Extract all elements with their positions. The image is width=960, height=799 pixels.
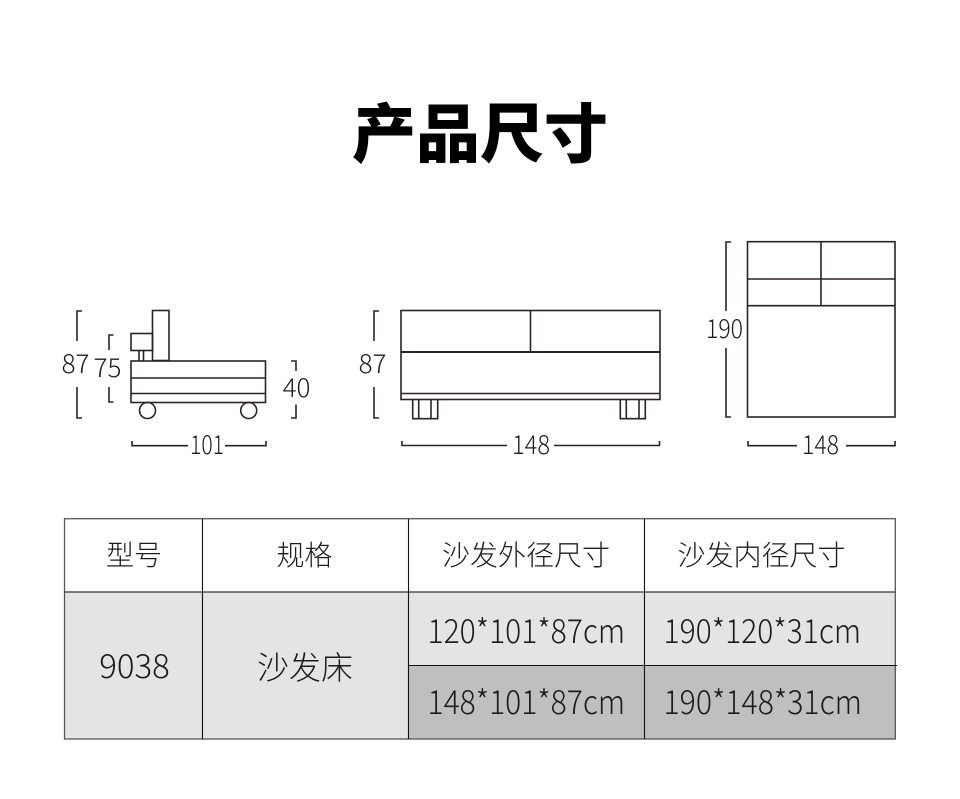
dimension: height 40 xyxy=(283,361,310,418)
sofa front outline xyxy=(401,310,660,419)
dimension: height 40: 40 xyxy=(283,368,310,405)
table header xyxy=(106,534,846,574)
model cell: 9038 xyxy=(99,640,170,688)
sofa top outline xyxy=(748,242,895,417)
table cell fills xyxy=(64,592,896,739)
dimension: width 148: 148 xyxy=(512,425,550,462)
outer size row 2: 148*101*87cm xyxy=(428,676,625,724)
dimension: height 87: 87 xyxy=(359,344,386,381)
dimension: height 87 xyxy=(62,311,89,418)
inner size row 2: 190*148*31cm xyxy=(664,676,862,724)
table header: 规格 xyxy=(276,534,333,574)
dimension: width 148 xyxy=(402,425,660,462)
table grid xyxy=(64,519,897,739)
title: 产品尺寸 xyxy=(352,84,608,176)
dimension: width 148: 148 xyxy=(802,425,839,462)
dimension: width 101: 101 xyxy=(190,425,224,462)
spec cell: 沙发床 xyxy=(257,643,353,689)
size table xyxy=(64,519,897,739)
dimension: depth 190 xyxy=(706,242,743,417)
dimension: height 87 xyxy=(359,311,386,418)
dimension: height 87: 87 xyxy=(62,344,89,381)
diagram: side view xyxy=(62,310,310,462)
table header: 沙发外径尺寸 xyxy=(442,534,610,574)
dimension: width 148 xyxy=(748,425,895,462)
table header: 型号 xyxy=(106,534,162,574)
outer size row 1: 120*101*87cm xyxy=(428,605,625,653)
diagram: front view xyxy=(359,310,660,462)
inner size row 1: 190*120*31cm xyxy=(664,605,861,653)
dimension: depth 190: 190 xyxy=(706,309,743,346)
dimension: height 75: 75 xyxy=(94,348,121,385)
dimension: height 75 xyxy=(94,335,121,402)
diagram: top view xyxy=(706,242,895,462)
sofa side outline xyxy=(131,310,266,418)
table header: 沙发内径尺寸 xyxy=(677,534,846,574)
dimension: width 101 xyxy=(132,425,266,462)
